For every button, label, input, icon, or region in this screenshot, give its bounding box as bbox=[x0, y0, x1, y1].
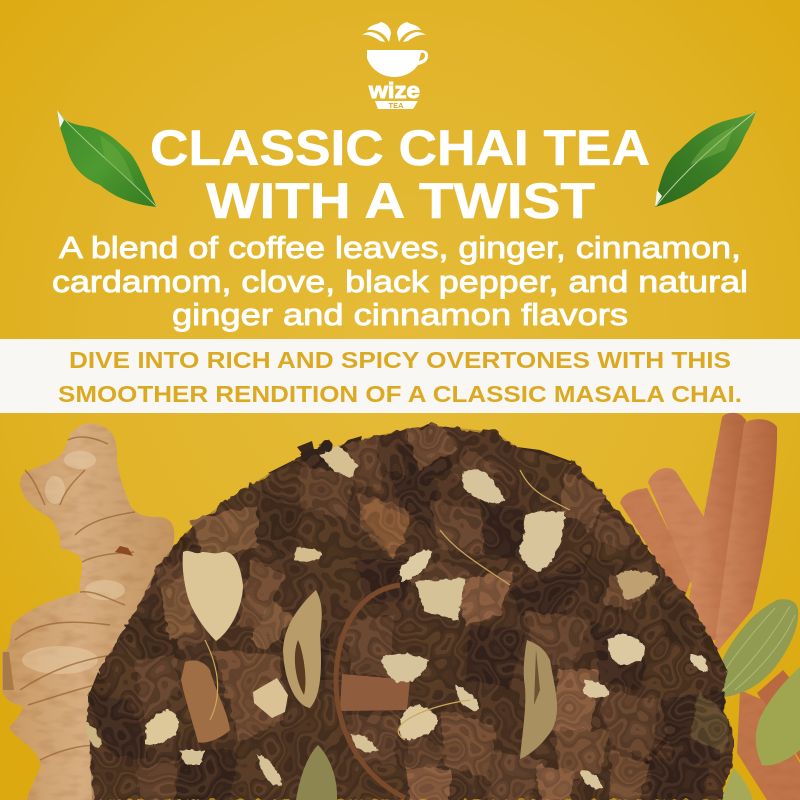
open cardamom pod bbox=[283, 590, 322, 708]
logo: wize wordmark: wize bbox=[368, 78, 420, 103]
dried leaf fragments bbox=[88, 425, 730, 800]
subtitle: ingredients: A blend of coffee leaves, ginger, cinnamon, bbox=[59, 230, 741, 265]
cardamom pod upper bbox=[713, 599, 798, 697]
tea leaf pile bbox=[80, 420, 740, 800]
tan cardamom pod bbox=[520, 640, 557, 759]
logo: left eyebrow leaf bbox=[362, 22, 391, 42]
back cinnamon sticks bbox=[620, 488, 692, 602]
tagline text bbox=[58, 347, 742, 407]
pale ginger chip bbox=[253, 678, 288, 718]
subtitle: ingredients bbox=[52, 230, 748, 332]
cinnamon texture bbox=[664, 478, 705, 572]
subtitle: ingredients: ginger and cinnamon flavors bbox=[172, 297, 628, 332]
cinnamon bark strip bbox=[340, 674, 410, 711]
ginger root bbox=[0, 420, 180, 800]
cinnamon chip bbox=[181, 660, 230, 743]
ginger ridges bbox=[15, 437, 135, 760]
tagline text: DIVE INTO RICH AND SPICY OVERTONES WITH THIS bbox=[69, 347, 731, 373]
ginger pieces bbox=[85, 445, 708, 788]
bottom cardamom pod bbox=[296, 745, 337, 800]
logo: tea badge: TEA bbox=[388, 101, 404, 110]
title bbox=[150, 120, 650, 229]
title: WITH A TWIST bbox=[206, 173, 595, 229]
front cinnamon sticks bbox=[689, 413, 746, 640]
pile base bbox=[88, 425, 733, 800]
title: CLASSIC CHAI TEA bbox=[150, 120, 650, 176]
logo: right eyebrow leaf bbox=[397, 22, 426, 42]
cardamom pod right bbox=[756, 667, 800, 765]
tagline text: SMOOTHER RENDITION OF A CLASSIC MASALA CHAI. bbox=[58, 381, 742, 407]
ginger fibres bbox=[205, 470, 570, 740]
light cardamom husk left bbox=[183, 551, 243, 641]
lower cinnamon sticks bbox=[757, 670, 800, 760]
cardamom pod bottom bbox=[720, 768, 753, 800]
logo: wize tea bbox=[362, 22, 428, 110]
ginger highlights bbox=[22, 451, 125, 674]
left leaf bbox=[57, 110, 157, 207]
right leaf bbox=[655, 111, 756, 207]
cinnamon sticks bbox=[615, 410, 800, 800]
curved cinnamon stem bbox=[336, 585, 405, 798]
ginger texture bbox=[2, 426, 156, 800]
cardamom pods bbox=[713, 599, 800, 800]
white tagline band bbox=[0, 339, 800, 413]
logo: smiling cup bbox=[367, 50, 428, 77]
subtitle: ingredients: cardamom, clove, black pepper, and natural bbox=[52, 264, 748, 299]
edge fragments and stems bbox=[88, 424, 728, 770]
broken leaf mottling bbox=[80, 420, 740, 800]
